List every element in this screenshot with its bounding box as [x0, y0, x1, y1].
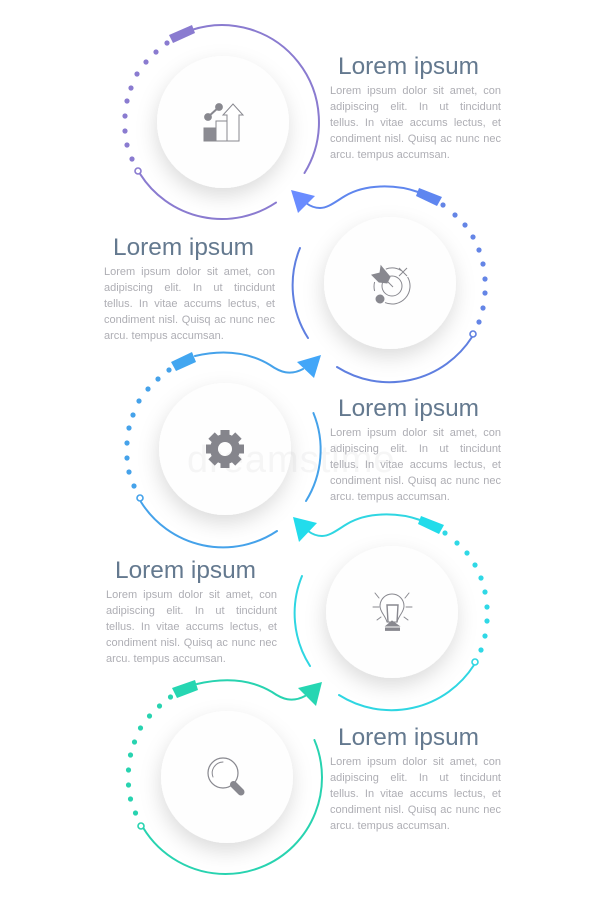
arrow head 4	[293, 517, 317, 542]
body text 4: tellus. In vitae accums lectus, et	[106, 621, 277, 633]
text block 5	[330, 724, 501, 832]
panel: step 1 ring	[122, 25, 319, 219]
ring marker 2	[470, 331, 476, 337]
body text 5: tellus. In vitae accums lectus, et	[330, 788, 501, 800]
heading 1: Lorem ipsum	[338, 53, 479, 80]
watermark: dreamstime	[187, 439, 396, 481]
body text 5: arcu. tempus accumsan.	[330, 820, 450, 832]
body text 1: condiment nisl. Quisq ac nunc nec	[330, 133, 501, 145]
body text 2: adipiscing elit. In ut tincidunt	[104, 282, 275, 294]
text block 3	[330, 395, 501, 503]
body text 1: tellus. In vitae accums lectus, et	[330, 117, 501, 129]
text block 4	[106, 557, 277, 665]
body text 4: arcu. tempus accumsan.	[106, 653, 226, 665]
heading 2: Lorem ipsum	[113, 234, 254, 261]
disc 2	[324, 217, 456, 349]
body text 5: condiment nisl. Quisq ac nunc nec	[330, 804, 501, 816]
arc 4 left	[295, 576, 310, 666]
arc 4 bottom	[339, 665, 474, 710]
ring marker 4	[472, 659, 478, 665]
body text 2: tellus. In vitae accums lectus, et	[104, 298, 275, 310]
panel: step 5 ring	[126, 680, 322, 874]
tab 4	[418, 516, 444, 534]
panel: step 3 ring	[124, 352, 321, 547]
body text 3: adipiscing elit. In ut tincidunt	[330, 443, 501, 455]
heading 5: Lorem ipsum	[338, 724, 479, 751]
disc 4	[326, 546, 458, 678]
dots 5	[126, 694, 173, 816]
arrow head 3	[297, 355, 321, 378]
tab 3	[171, 352, 196, 371]
arc 3 right	[306, 413, 321, 501]
text block 1	[330, 53, 501, 161]
body text 2: condiment nisl. Quisq ac nunc nec	[104, 314, 275, 326]
arc 1 bottom	[140, 174, 276, 219]
disc 3	[159, 383, 291, 515]
heading 4: Lorem ipsum	[115, 557, 256, 584]
panel: step 2 ring	[291, 186, 488, 382]
body text 4: Lorem ipsum dolor sit amet, con	[106, 589, 277, 601]
arrow head 5	[298, 682, 322, 706]
body text 3: tellus. In vitae accums lectus, et	[330, 459, 501, 471]
body text 1	[330, 85, 501, 161]
heading 3: Lorem ipsum	[338, 395, 479, 422]
arrow head 2	[291, 190, 315, 213]
connector curve 2	[306, 186, 418, 208]
body text 4: adipiscing elit. In ut tincidunt	[106, 605, 277, 617]
disc 1	[157, 56, 289, 188]
body text 1: arcu. tempus accumsan.	[330, 149, 450, 161]
body text 5	[330, 756, 501, 832]
body text 5: Lorem ipsum dolor sit amet, con	[330, 756, 501, 768]
icon: light bulb	[373, 593, 412, 630]
arc 2 left	[293, 248, 308, 338]
tab 2	[416, 188, 442, 206]
arc 5 right and bottom	[143, 740, 322, 874]
body text 3	[330, 427, 501, 503]
text block 2	[104, 234, 275, 342]
dots 1	[122, 40, 170, 162]
connector curve 3	[195, 353, 303, 373]
dots 4	[442, 530, 490, 653]
icon: target with dart	[372, 266, 410, 304]
body text 3: arcu. tempus accumsan.	[330, 491, 450, 503]
icon: magnifying glass	[208, 758, 241, 792]
connector curve 5	[197, 680, 305, 700]
body text 2: arcu. tempus accumsan.	[104, 330, 224, 342]
panel: step 4 ring	[293, 514, 490, 710]
icon: growth chart with arrow	[204, 104, 243, 141]
icon: gear	[206, 430, 244, 468]
body text 5: adipiscing elit. In ut tincidunt	[330, 772, 501, 784]
arc 3 bottom	[141, 502, 277, 547]
ring marker 5	[138, 823, 144, 829]
body text 1: adipiscing elit. In ut tincidunt	[330, 101, 501, 113]
body text 4: condiment nisl. Quisq ac nunc nec	[106, 637, 277, 649]
connector curve 4	[308, 514, 420, 536]
body text 4	[106, 589, 277, 665]
body text 3: Lorem ipsum dolor sit amet, con	[330, 427, 501, 439]
dots 3	[124, 367, 172, 489]
disc 5	[161, 711, 293, 843]
body text 3: condiment nisl. Quisq ac nunc nec	[330, 475, 501, 487]
dots 2	[440, 202, 488, 325]
body text 2	[104, 266, 275, 342]
ring marker 3	[137, 495, 143, 501]
tab 1	[169, 25, 195, 43]
arc 2 bottom	[337, 337, 472, 382]
arc 1 upper right	[192, 25, 319, 173]
tab 5	[172, 680, 198, 698]
body text 2: Lorem ipsum dolor sit amet, con	[104, 266, 275, 278]
ring marker 1	[135, 168, 141, 174]
body text 1: Lorem ipsum dolor sit amet, con	[330, 85, 501, 97]
